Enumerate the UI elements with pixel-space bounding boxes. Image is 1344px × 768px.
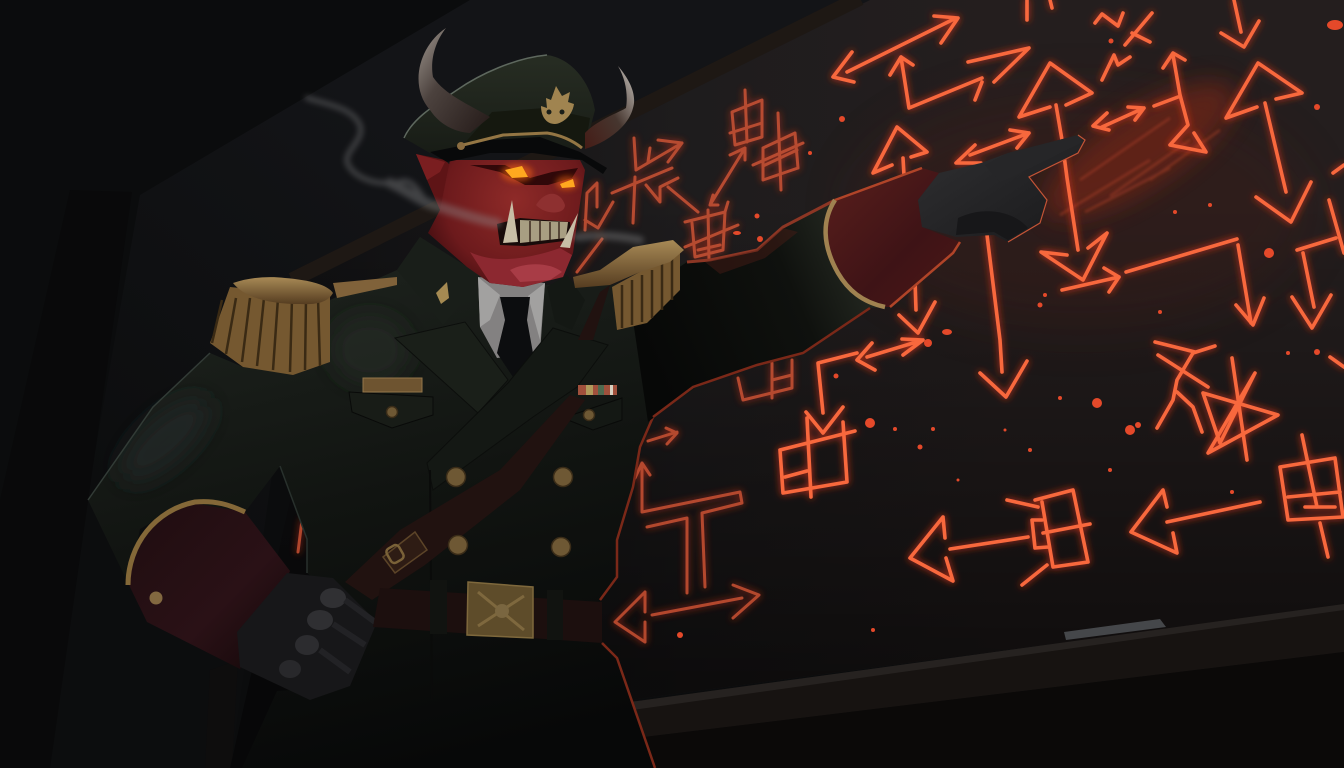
strap buckle (383, 532, 427, 573)
left epaulette (210, 277, 397, 375)
extended right arm (630, 200, 890, 422)
left horn (419, 28, 490, 133)
coat front seam (430, 470, 432, 700)
left cuff (128, 502, 290, 669)
red chalk smear (1025, 57, 1255, 243)
collar (397, 237, 585, 330)
demon head (416, 154, 585, 287)
left lapel (395, 322, 508, 413)
right epaulette (573, 240, 684, 330)
chalk splatter (677, 20, 1343, 638)
right cuff (824, 168, 960, 307)
demon officer (88, 28, 1085, 768)
belt with buckle (373, 580, 602, 643)
sleeve and chest soft light (106, 315, 410, 497)
coat body (88, 237, 700, 768)
chalk diagrams, dim left cluster (298, 90, 803, 642)
shirt and tie (478, 277, 545, 383)
chalk diagrams, bright main cluster (780, 0, 1344, 585)
brass buttons (386, 406, 594, 556)
right lapel (427, 328, 608, 490)
tray with eraser (630, 604, 1344, 768)
officer cap (404, 55, 607, 174)
chest pockets and insignia (349, 378, 622, 430)
coat edge lighting (600, 417, 655, 768)
smoke (307, 98, 640, 240)
shoulder strap (345, 285, 610, 600)
pointing glove (918, 135, 1085, 242)
right horn (585, 66, 634, 149)
clenched glove (237, 573, 377, 700)
